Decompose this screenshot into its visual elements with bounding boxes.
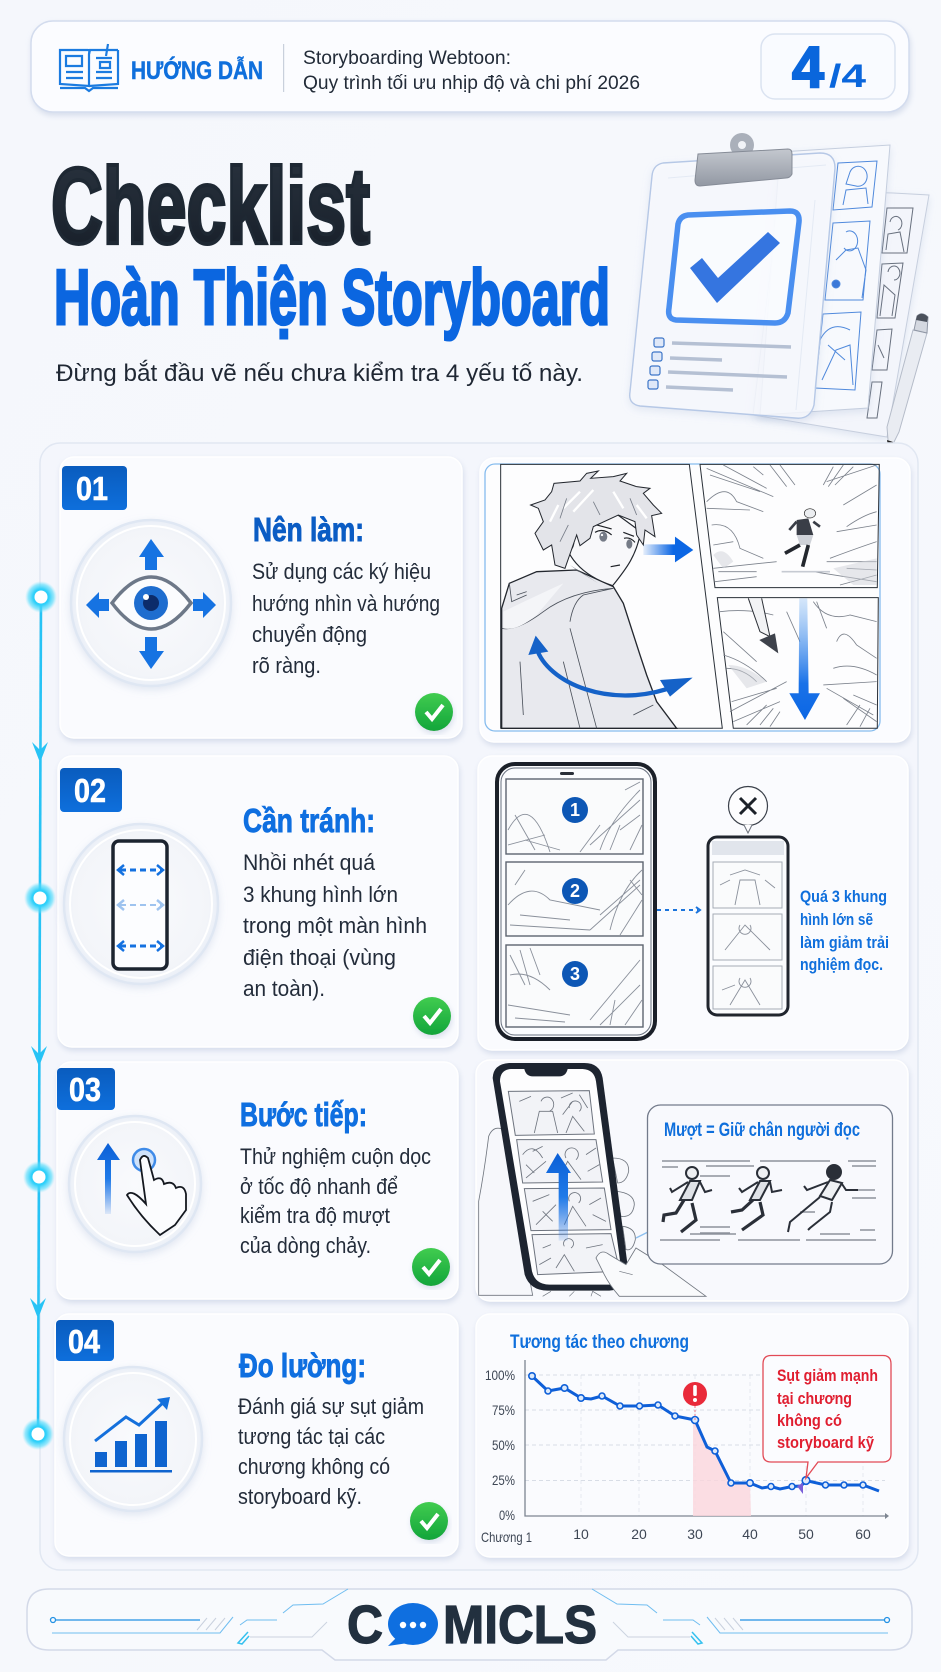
body text: tương tác tại các: [238, 1424, 385, 1449]
panel: step 04 text card: [55, 1314, 458, 1556]
note text: [800, 887, 889, 974]
icon: eye with direction arrows: [71, 520, 231, 686]
heading: Nên làm:: [253, 511, 364, 548]
callout: reader retention: [636, 1105, 892, 1264]
body text: [252, 559, 440, 678]
heading: Đo lường:: [239, 1347, 366, 1384]
timeline: [22, 581, 57, 1450]
title: Checklist: [51, 145, 370, 266]
body text: [238, 1394, 424, 1509]
body text: Nhồi nhét quá: [243, 850, 375, 875]
label: huong dan: HƯỚNG DẪN: [131, 55, 263, 85]
character: hair: [531, 471, 662, 568]
page counter: [761, 34, 895, 100]
body text: [240, 1144, 431, 1258]
footer brand bar: [27, 1589, 912, 1660]
callout: sharp drop: Sụt giảm mạnh: [777, 1366, 878, 1385]
body text: Đánh giá sự sụt giảm: [238, 1394, 424, 1419]
logo: comicls: C: [347, 1595, 383, 1655]
badge 02: [60, 768, 122, 812]
heading: Bước tiếp:: [240, 1096, 367, 1133]
axis labels: 100%: [485, 1367, 515, 1383]
character: eyes and mouth: [595, 525, 635, 567]
engagement line: [529, 1373, 879, 1494]
note text: nghiệm đọc.: [800, 955, 883, 974]
callout: x mark: [728, 786, 768, 833]
icon: green check: [415, 693, 453, 731]
clip: [695, 133, 792, 186]
body text: storyboard kỹ.: [238, 1484, 362, 1509]
body text: Thử nghiệm cuộn dọc: [240, 1144, 431, 1169]
callout: sharp drop: tại chương: [777, 1389, 852, 1408]
callout: sharp drop: storyboard kỹ: [777, 1433, 874, 1452]
axis labels: 20: [631, 1526, 647, 1542]
badge 02: 02: [74, 772, 106, 809]
large phone with 3 frames: [497, 764, 655, 1039]
body text: Sử dụng các ký hiệu: [252, 559, 431, 584]
icon: green check: [410, 1502, 448, 1540]
runner figures: [663, 1165, 858, 1232]
chart grid and axes: [525, 1360, 889, 1519]
panel: step 02 phone comparison: [478, 756, 908, 1050]
body text: kiểm tra độ mượt: [240, 1203, 391, 1228]
axis labels: 50%: [492, 1437, 515, 1453]
axis labels: 25%: [492, 1472, 515, 1488]
arrow: downward: [789, 598, 820, 720]
page counter: 4: [792, 35, 824, 100]
body text: của dòng chảy.: [240, 1233, 371, 1258]
speed lines: [660, 1161, 876, 1240]
axis labels: [481, 1367, 871, 1545]
callout: sharp drop: [763, 1356, 891, 1478]
badge 03: 03: [69, 1071, 101, 1108]
body text: hướng nhìn và hướng: [252, 591, 440, 616]
panel: step 03 scrolling phone and runners: [476, 1060, 908, 1301]
body text: chuyển động: [252, 622, 367, 647]
body text: điện thoại (vùng: [243, 945, 396, 970]
chart title: Tương tác theo chương: [510, 1332, 689, 1353]
icon: open book: [60, 44, 118, 91]
scene: bottom right: [720, 598, 877, 727]
callout: reader retention: Mượt = Giữ chân người đọc: [664, 1120, 860, 1141]
axis labels: 60: [855, 1526, 871, 1542]
numbered markers: 2: [570, 881, 580, 901]
series title: [303, 48, 640, 94]
illustration: clipboard with storyboard sheets: [630, 133, 929, 452]
arrow: gaze right: [643, 537, 693, 562]
icon: rising bar chart: [64, 1367, 202, 1511]
circuit decoration right: [592, 1589, 890, 1644]
note text: làm giảm trải: [800, 933, 889, 952]
hand back: [479, 1128, 533, 1295]
numbered markers: 1: [570, 800, 580, 820]
drop area highlight: [693, 1420, 751, 1516]
phone frames: [508, 1091, 620, 1275]
panel: step 01 manga example: [480, 458, 910, 742]
logo: comicls: MICLS: [443, 1595, 597, 1655]
note text: hình lớn sẽ: [800, 910, 873, 929]
scene: top right runner: [707, 465, 877, 585]
thumb: [596, 1248, 706, 1296]
body text: [243, 850, 427, 1001]
axis labels: 0%: [499, 1507, 515, 1523]
arrow: curved motion: [528, 636, 693, 697]
body text: rõ ràng.: [252, 653, 321, 678]
header bar: [31, 21, 909, 112]
title: [51, 145, 610, 341]
numbered markers: [562, 797, 588, 987]
axis labels: 10: [573, 1526, 589, 1542]
dashed arrow: [657, 907, 700, 913]
axis labels: 40: [742, 1526, 758, 1542]
note text: Quá 3 khung: [800, 887, 887, 906]
body text: an toàn).: [243, 976, 325, 1001]
timeline nodes: [22, 581, 57, 1450]
small phone: [708, 837, 788, 1015]
series title: Storyboarding Webtoon:: [303, 48, 511, 69]
manga frame lines: [501, 464, 879, 728]
badge 03: [57, 1068, 115, 1110]
axis labels: 75%: [492, 1402, 515, 1418]
big check box: [669, 211, 799, 323]
panel: step 04 line chart: [476, 1314, 908, 1557]
circuit decoration left: [50, 1589, 348, 1644]
icon: green check: [413, 997, 451, 1035]
icon: phone safe zone: [64, 824, 218, 984]
series title: Quy trình tối ưu nhịp độ và chi phí 2026: [303, 73, 640, 94]
checklist rows: [648, 338, 791, 390]
body text: chương không có: [238, 1454, 390, 1479]
arrow: scroll up: [546, 1153, 571, 1241]
panel: step 02 text card: [58, 756, 458, 1047]
body text: 3 khung hình lớn: [243, 882, 398, 907]
badge 04: [56, 1320, 114, 1361]
clipboard body: [630, 153, 835, 418]
axis labels: 30: [687, 1526, 703, 1542]
icon: warning: [683, 1382, 707, 1420]
badge 01: 01: [76, 470, 108, 507]
body text: trong một màn hình: [243, 913, 427, 938]
title: Hoàn Thiện Storyboard: [54, 253, 610, 341]
panel: step 03 text card: [57, 1062, 458, 1299]
page counter: /4: [829, 58, 866, 94]
icon: scroll gesture: [69, 1116, 201, 1252]
phone: [493, 1063, 628, 1291]
logo speech bubble: [388, 1603, 438, 1646]
subtitle: Đừng bắt đầu vẽ nếu chưa kiểm tra 4 yếu tố này.: [56, 360, 583, 387]
axis labels: 50: [798, 1526, 814, 1542]
axis labels: Chương 1: [481, 1529, 532, 1545]
badge 04: 04: [68, 1323, 101, 1360]
character: face: [563, 512, 641, 586]
back sheet: [753, 190, 929, 437]
body text: ở tốc độ nhanh để: [240, 1174, 398, 1199]
main checklist container: [40, 443, 918, 1570]
icon: green check: [412, 1248, 450, 1286]
numbered markers: 3: [570, 964, 580, 984]
logo: comicls: [347, 1595, 597, 1655]
heading: Cần tránh:: [243, 802, 375, 839]
pencil: [887, 314, 928, 452]
badge 01: [62, 466, 127, 510]
timeline arrows: [30, 742, 48, 1316]
callout: sharp drop: không có: [777, 1411, 842, 1430]
panel: step 01 text card: [60, 457, 462, 738]
middle sheet: [760, 145, 890, 415]
character: hoodie: [502, 570, 677, 728]
